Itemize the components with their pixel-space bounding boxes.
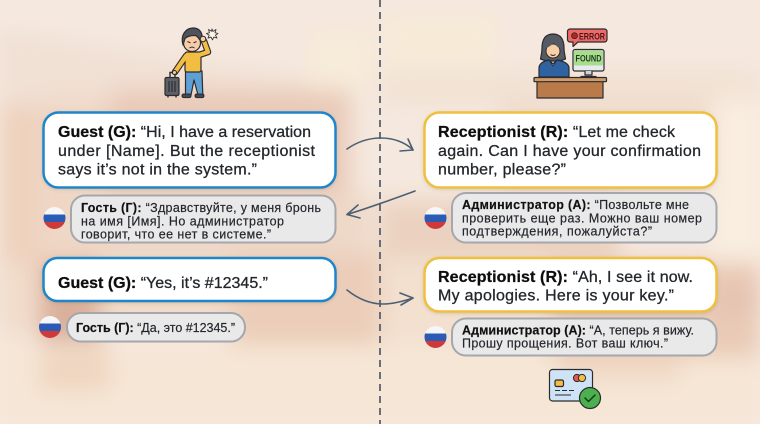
icon: jeans and shoes [182,71,204,98]
icon: Russian flag 3 [424,207,446,229]
icon: receptionist blue jacket [539,60,569,77]
text: guest line 1 Russian: Гость (Г): “Здравствуйте, у меня бронь [81,201,321,215]
text: receptionist line 2: Receptionist (R): “Ah, I see it now. [438,269,693,286]
text: receptionist line 2 [438,269,693,305]
panel: guest line 2 English [44,258,336,301]
text: guest line 2: Guest (G): “Yes, it’s #12345.” [58,275,268,292]
panel: receptionist line 2 English [424,258,716,312]
text: receptionist line 1 [438,124,701,178]
text: receptionist line 1: again. Can I have your confirmation [438,143,701,160]
text: receptionist line 1: Receptionist (R): “Let me check [438,124,676,141]
icon: Russian flag 1 [44,207,66,229]
text: receptionist line 2 Russian: Администратор (А): “А, теперь я вижу. [462,324,694,338]
text: guest line 1: under [Name]. But the receptionist [58,143,316,160]
icon: receptionist face [546,39,560,58]
icon: computer monitor with FOUND: FOUND [576,54,602,64]
arrow: guest to receptionist top [347,138,413,151]
icon: angry face and hair [182,28,206,52]
text: guest line 1 Russian: говорит, что ее нет в системе.” [81,228,271,242]
text: guest line 1 Russian: на имя [Имя]. Но администратор [81,214,284,228]
icon: Russian flag 4 [424,326,446,348]
icon: frustrated guest with luggage [165,28,218,98]
icon: Russian flag 2 [39,316,61,338]
text: receptionist line 2 Russian [462,324,694,351]
text: receptionist line 1 Russian [462,198,702,239]
icon: yellow sweater and arms [172,41,208,74]
icon: receptionist at desk [534,29,607,98]
text: receptionist line 1 Russian: Администратор (А): “Позвольте мне [462,198,689,212]
panel: receptionist line 1 Russian [452,193,716,242]
text: guest line 2 Russian: Гость (Г): “Да, это #12345.” [76,321,235,335]
panel: receptionist line 1 English [424,112,716,188]
arrow: receptionist to guest [347,191,415,218]
text: guest line 1: says it’s not in the system.” [58,162,257,178]
text: receptionist line 1: number, please?” [438,162,566,178]
text: receptionist line 2: My apologies. Here is your key.” [438,288,674,305]
panel: guest line 2 Russian [67,313,245,342]
panel: guest line 1 Russian [71,196,336,242]
panel: receptionist line 2 Russian [452,318,716,356]
icon: anger mark [206,29,218,40]
text: guest line 1: Guest (G): “Hi, I have a reservation [58,124,311,141]
icon: wooden desk [534,78,606,98]
icon: luggage [165,72,179,98]
arrow: guest to receptionist bottom [347,290,413,305]
text: receptionist line 1 Russian: проверить еще раз. Можно ваш номер [462,212,702,226]
panel: guest line 1 English [44,112,336,188]
text: guest line 1 Russian [81,201,321,242]
icon: receptionist hair [540,34,566,61]
text: receptionist line 2 Russian: Прошу прощения. Вот ваш ключ.” [462,337,668,351]
icon: error speech bubble: ERROR [579,31,605,42]
text: receptionist line 1 Russian: подтверждения, пожалуйста?” [462,225,652,239]
text: guest line 1 [58,124,316,178]
center dashed divider [379,0,381,424]
icon: credit card with check mark [550,370,600,408]
